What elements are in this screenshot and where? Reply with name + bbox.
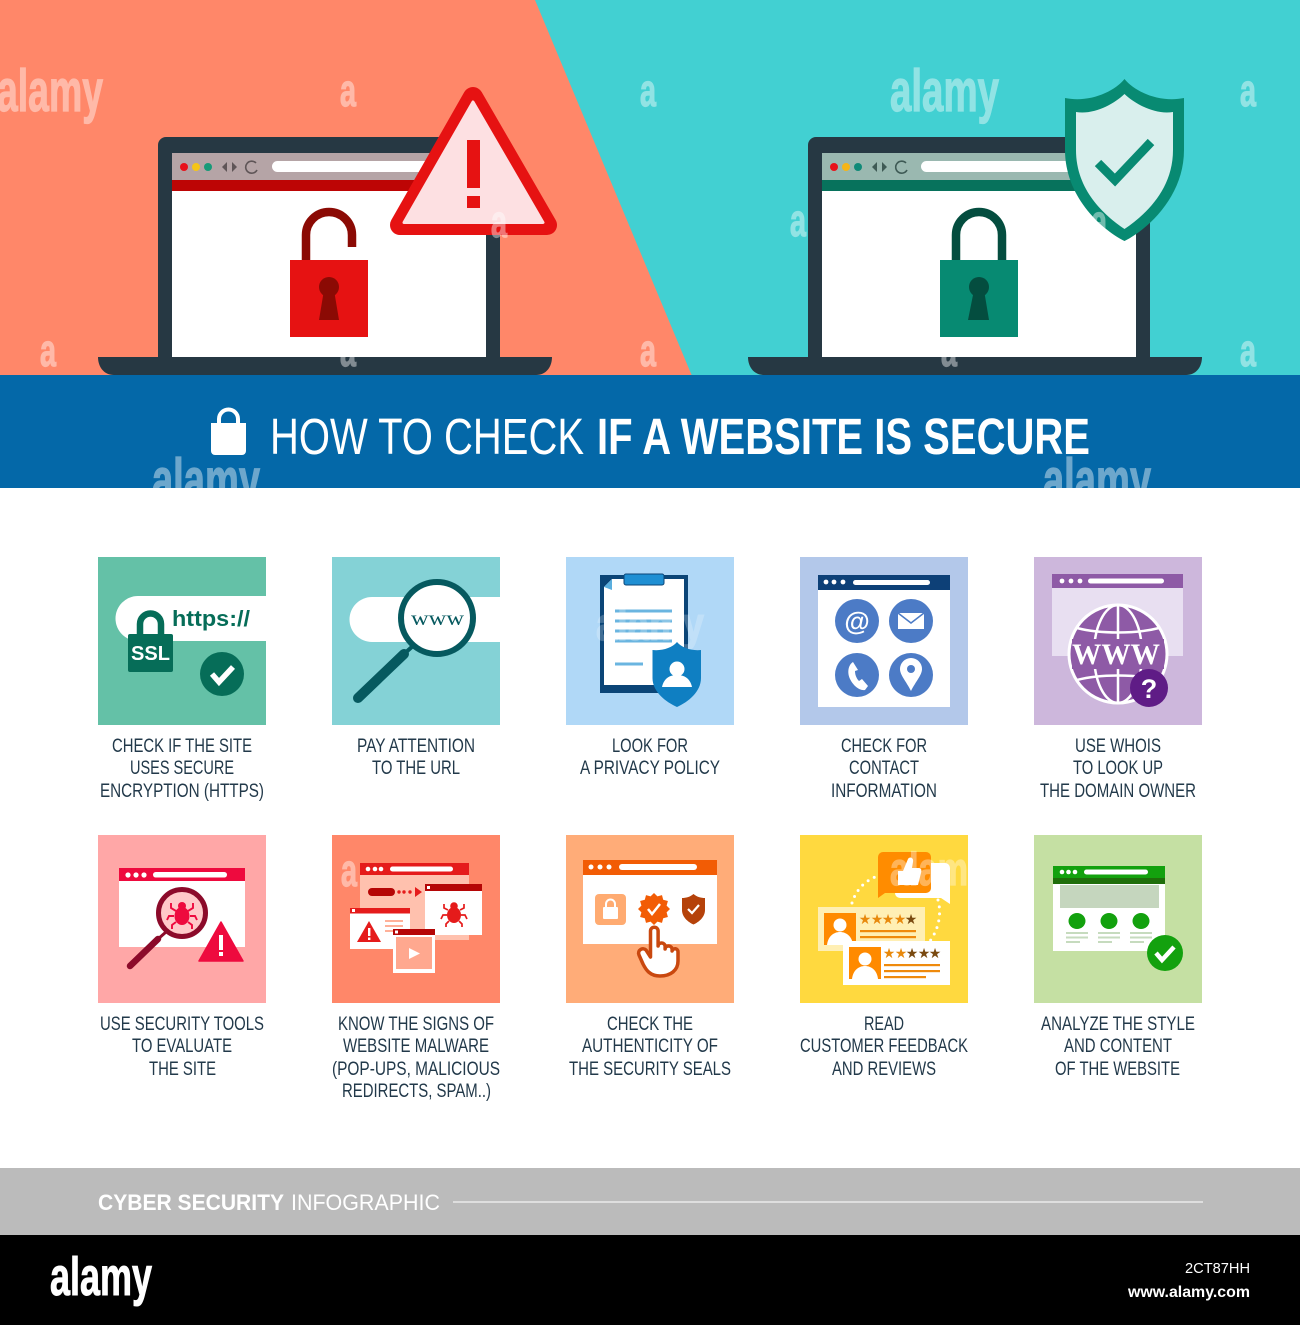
- panel: malware signs: [332, 835, 500, 1003]
- label: seals: THE SECURITY SEALS: [569, 1059, 731, 1080]
- card: review two: ★: [883, 945, 895, 961]
- label: whois: THE DOMAIN OWNER: [1040, 781, 1196, 802]
- stock photo strip: 2CT87HH: [1185, 1260, 1250, 1277]
- label: https: USES SECURE: [130, 758, 234, 779]
- label: whois: TO LOOK UP: [1073, 758, 1163, 779]
- stock photo strip: alamy: [50, 1247, 152, 1307]
- label: security tools: [100, 1014, 264, 1080]
- panel: whois lookup: [1034, 557, 1202, 725]
- icon: seal shield: [682, 894, 705, 924]
- icon: SSL lock: SSL: [131, 643, 170, 665]
- icon: check shield: [1065, 79, 1184, 241]
- label: url: PAY ATTENTION: [357, 736, 475, 757]
- watermark: marks over laptops: a: [1091, 196, 1108, 247]
- watermark: marks over laptops: [340, 196, 1108, 376]
- label: seals: AUTHENTICITY OF: [582, 1036, 718, 1057]
- card: review one: ★: [882, 911, 894, 927]
- label: privacy: [580, 736, 720, 779]
- stock photo strip: www.alamy.com: [1127, 1284, 1250, 1301]
- label: malware: KNOW THE SIGNS OF: [338, 1014, 494, 1035]
- icon: map pin: [889, 653, 933, 697]
- icon: user shield: [652, 642, 701, 707]
- stock photo strip: [0, 1235, 1300, 1325]
- label: contact: [831, 736, 937, 802]
- label: style: AND CONTENT: [1064, 1036, 1172, 1057]
- card: review one: ★: [894, 911, 906, 927]
- icon: verified badge: [638, 893, 670, 925]
- watermark: privacy tile logo: alamy: [596, 598, 704, 650]
- icon: green check: [1147, 935, 1183, 971]
- watermark: marks over laptops: a: [491, 196, 508, 247]
- label: feedback: READ: [864, 1014, 904, 1035]
- icon: pointing hand: [639, 927, 678, 976]
- label: contact: CHECK FOR: [841, 736, 927, 757]
- watermark: feedback tile logo: alam: [890, 843, 968, 895]
- label: style: [1041, 1014, 1195, 1080]
- icon: clipboard: [600, 574, 688, 693]
- label: malware: (POP-UPS, MALICIOUS: [332, 1059, 500, 1080]
- card: review two: ★: [929, 945, 941, 961]
- popup: bug window: [425, 884, 482, 935]
- icon: closed padlock: [940, 212, 1018, 337]
- popup: video window: [393, 929, 435, 973]
- icon: www globe: WWW: [1072, 638, 1160, 671]
- panel: customer feedback: [800, 835, 968, 1003]
- panel: https encryption: https://: [172, 606, 250, 631]
- title text: HOW TO CHECK: [270, 408, 584, 465]
- label: url: TO THE URL: [372, 758, 460, 779]
- title banner: [0, 375, 1300, 513]
- icon: question badge: [1130, 669, 1168, 707]
- watermark: hero logos: [0, 58, 1257, 376]
- watermark: hero logos: a: [1240, 65, 1257, 116]
- label: contact: CONTACT: [849, 758, 919, 779]
- icon: email at: @: [844, 606, 870, 636]
- watermark: marks over laptops: a: [941, 325, 958, 376]
- panel: contact information: [800, 557, 968, 725]
- panel: security seals: [566, 835, 734, 1003]
- card: review one: ★: [871, 911, 883, 927]
- label: security tools: USE SECURITY TOOLS: [100, 1014, 264, 1035]
- hero background: teal safe side: [0, 0, 1300, 376]
- label: contact: INFORMATION: [831, 781, 937, 802]
- card: review two: ★: [906, 945, 918, 961]
- hero background: salmon unsafe side: [0, 0, 692, 376]
- laptop: secure site: [748, 79, 1202, 375]
- watermark: hero logos: a: [640, 65, 657, 116]
- label: feedback: CUSTOMER FEEDBACK: [800, 1036, 968, 1057]
- label: security tools: THE SITE: [149, 1059, 216, 1080]
- card: review two: ★: [895, 945, 907, 961]
- watermark: hero logos: a: [640, 325, 657, 376]
- icon: open padlock: [290, 212, 368, 337]
- watermark: hero logos: a: [790, 195, 807, 246]
- watermark: hero logos: a: [40, 325, 57, 376]
- label: whois: USE WHOIS: [1075, 736, 1161, 757]
- icon: SSL lock: [128, 614, 173, 672]
- label: style: ANALYZE THE STYLE: [1041, 1014, 1195, 1035]
- card: review two: ★: [918, 945, 930, 961]
- footer bar: [0, 1168, 1300, 1235]
- label: url: [357, 736, 475, 779]
- label: security tools: TO EVALUATE: [132, 1036, 232, 1057]
- panel: url check: [332, 557, 500, 725]
- label: privacy: A PRIVACY POLICY: [580, 758, 720, 779]
- icon: magnifier with www: www: [411, 606, 465, 630]
- label: https: [100, 736, 264, 802]
- panel: privacy policy: [566, 557, 734, 725]
- icon: padlock seal: [595, 894, 626, 925]
- watermark: marks over laptops: a: [340, 325, 357, 376]
- label: malware: WEBSITE MALWARE: [343, 1036, 489, 1057]
- label: https: CHECK IF THE SITE: [112, 736, 252, 757]
- title text: [270, 408, 1090, 465]
- icon: phone: [835, 653, 879, 697]
- label: feedback: AND REVIEWS: [832, 1059, 936, 1080]
- watermark: hero logos: a: [340, 65, 357, 116]
- icon: magnifier with www: [358, 582, 473, 698]
- label: malware: REDIRECTS, SPAM..): [342, 1081, 491, 1102]
- icon: warning triangle: [400, 97, 547, 225]
- popup: alert window: [350, 908, 410, 949]
- footer bar: CYBER SECURITY: [98, 1190, 284, 1215]
- card: review one: [818, 907, 925, 951]
- label: https: ENCRYPTION (HTTPS): [100, 781, 264, 802]
- panel: security tools: [98, 835, 266, 1003]
- main browser window: [360, 863, 469, 940]
- card: review one: ★: [905, 911, 917, 927]
- icon: thumbs up bubbles: [878, 852, 950, 904]
- icon: bug magnifier: [130, 890, 206, 966]
- watermark: banner logos: alamy: [1043, 447, 1151, 513]
- panel: https encryption: [98, 557, 266, 725]
- label: privacy: LOOK FOR: [612, 736, 688, 757]
- icon: envelope: [889, 599, 933, 643]
- icon: www globe: [1069, 605, 1167, 703]
- white content area: [0, 488, 1300, 1168]
- watermark: malware tile mark: a: [341, 845, 358, 896]
- watermark: banner logos: [152, 447, 1151, 513]
- icon: question badge: ?: [1141, 674, 1157, 704]
- watermark: hero logos: alamy: [890, 58, 999, 124]
- label: style: OF THE WEBSITE: [1055, 1059, 1180, 1080]
- icon: banner lock: [211, 410, 246, 455]
- watermark: hero logos: alamy: [0, 58, 103, 124]
- title text: IF A WEBSITE IS SECURE: [597, 408, 1090, 465]
- icon: check badge: [200, 652, 244, 696]
- label: seals: CHECK THE: [607, 1014, 693, 1035]
- watermark: banner logos: alamy: [152, 447, 260, 513]
- label: malware: [332, 1014, 500, 1102]
- watermark: hero logos: a: [1240, 325, 1257, 376]
- panel: style and content: [1034, 835, 1202, 1003]
- card: review one: ★: [859, 911, 871, 927]
- label: whois: [1040, 736, 1196, 802]
- label: seals: [569, 1014, 731, 1080]
- laptop: insecure site: [98, 97, 552, 375]
- label: feedback: [800, 1014, 968, 1080]
- icon: email at: [835, 599, 879, 643]
- icon: alert triangle: [199, 922, 243, 961]
- card: review two: [843, 941, 950, 985]
- footer bar: INFOGRAPHIC: [291, 1190, 440, 1215]
